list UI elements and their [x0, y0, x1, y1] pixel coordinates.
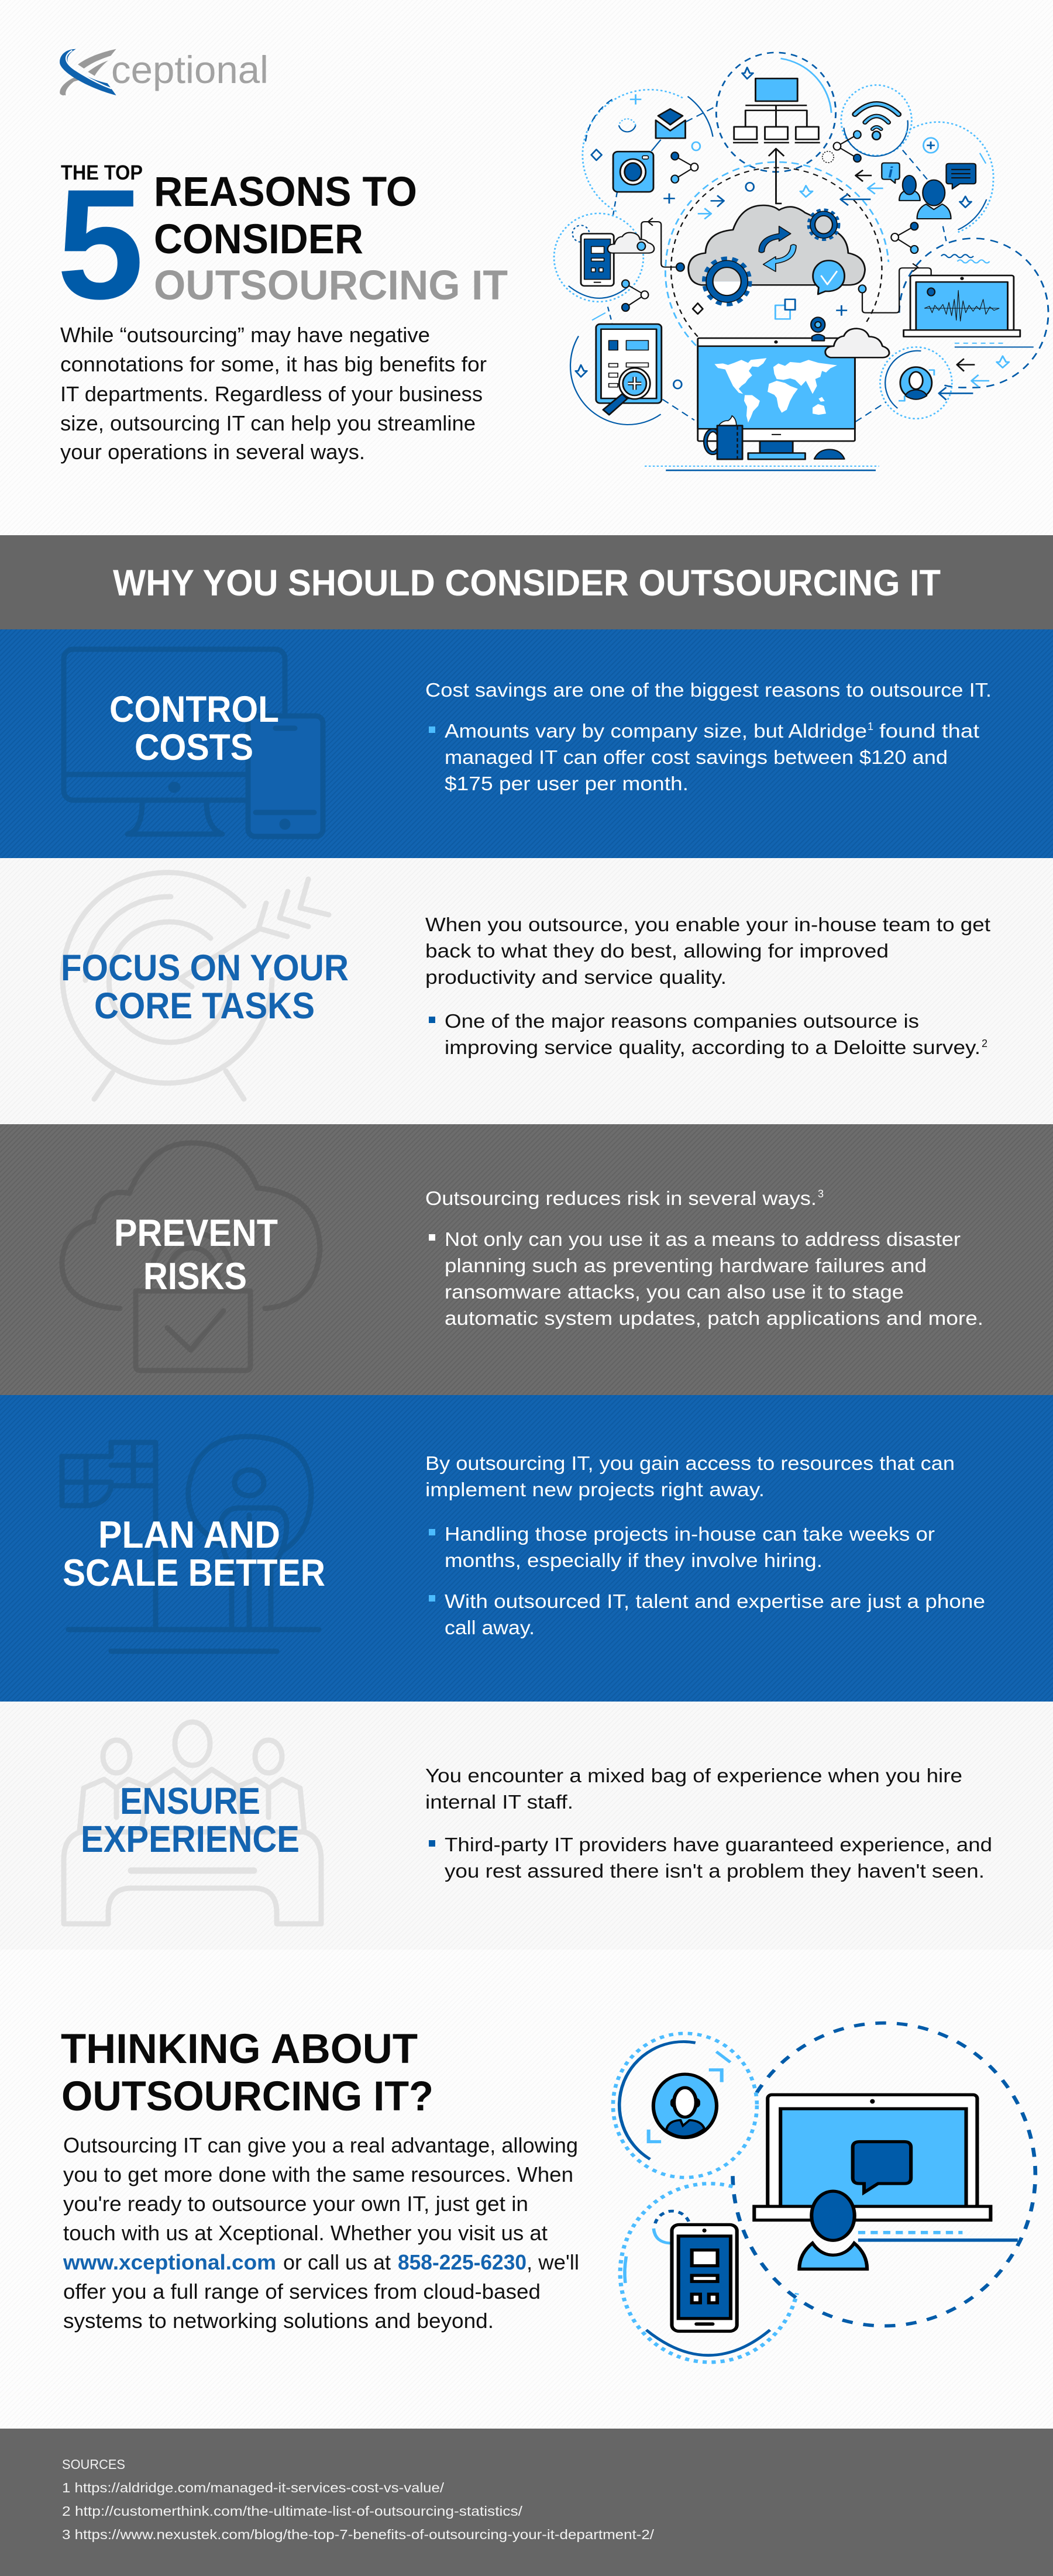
text: control costs: Cost savings are one of the biggest reasons to outsource IT.	[425, 679, 992, 701]
icon: info bubble: i	[888, 164, 893, 181]
panel: focus on core tasks	[0, 858, 1053, 1124]
title: REASONS TO	[154, 169, 417, 215]
icon: share nodes	[622, 130, 918, 311]
text: plan and scale better	[425, 1452, 985, 1638]
text: call to action paragraph: you're ready to outsource your own IT, just get in	[63, 2192, 528, 2216]
icon: info bubble	[882, 163, 900, 183]
heading: ensure experience: EXPERIENCE	[81, 1818, 300, 1860]
icon: sync arrows	[759, 226, 796, 271]
heading: focus on your core tasks	[61, 948, 349, 1027]
intro paragraph: your operations in several ways.	[60, 440, 365, 464]
text: ensure experience: you rest assured there isn't a problem they haven't seen.	[445, 1860, 985, 1882]
title	[57, 156, 508, 332]
text: prevent risks: automatic system updates, patch applications and more.	[445, 1307, 983, 1329]
text: focus on your core tasks	[425, 914, 990, 1058]
text: control costs: managed IT can offer cost savings between $120 and	[445, 746, 948, 768]
icon: headset avatar	[653, 2074, 717, 2138]
icon: team at table	[64, 1722, 321, 1924]
text: plan and scale better: months, especially if they involve hiring.	[445, 1549, 823, 1571]
footer: sources: SOURCES	[62, 2457, 125, 2472]
heading: prevent risks: RISKS	[143, 1255, 247, 1297]
heading: control costs	[109, 689, 279, 768]
heading: prevent risks	[114, 1211, 278, 1297]
panel: control costs	[0, 629, 1053, 858]
icon: coffee mug	[706, 416, 742, 459]
heading: prevent risks: PREVENT	[114, 1211, 278, 1254]
text: prevent risks: Outsourcing reduces risk in several ways.	[425, 1187, 817, 1209]
text: focus on your core tasks: improving service quality, according to a Deloitte survey.	[445, 1036, 980, 1058]
heading: plan and scale better	[63, 1513, 325, 1594]
gear: right	[809, 210, 838, 239]
title: 5	[57, 156, 144, 332]
icon: laptop with chat bubble	[754, 2095, 990, 2220]
heading: plan and scale better: SCALE BETTER	[63, 1551, 325, 1594]
footer: sources: 1 https://aldridge.com/managed-it-services-cost-vs-value/	[62, 2480, 445, 2495]
text: focus on your core tasks: productivity and service quality.	[425, 966, 727, 988]
heading: focus on your core tasks: FOCUS ON YOUR	[61, 948, 349, 989]
icon: monitor cloud	[825, 329, 889, 357]
icon: central cloud with gears	[689, 205, 865, 304]
text: prevent risks: 3	[818, 1188, 824, 1200]
text: plan and scale better: call away.	[445, 1617, 535, 1638]
icon: monitor and tablet	[64, 649, 323, 836]
text: prevent risks: Not only can you use it as a means to address disaster	[445, 1228, 961, 1250]
text: call to action paragraph: www.xceptional.com	[63, 2250, 276, 2274]
title: THE TOP	[61, 161, 143, 184]
icon: smartphone	[672, 2224, 737, 2331]
panel: prevent risks	[0, 1124, 1053, 1395]
illustration: support, laptop and phone	[613, 2023, 1035, 2362]
heading: control costs: COSTS	[135, 727, 253, 768]
hero: dashed orbit circles	[554, 53, 1048, 425]
heading: focus on your core tasks: CORE TASKS	[94, 986, 315, 1027]
text: control costs	[425, 679, 992, 794]
text: plan and scale better: implement new projects right away.	[425, 1479, 765, 1500]
text: plan and scale better: With outsourced IT, talent and expertise are just a phone	[445, 1590, 985, 1612]
title: CONSIDER	[154, 216, 363, 263]
icon: support people and chat	[899, 164, 976, 219]
intro paragraph: While “outsourcing” may have negative	[60, 323, 430, 347]
heading: plan and scale better: PLAN AND	[98, 1513, 280, 1556]
intro paragraph: connotations for some, it has big benefits for	[60, 352, 487, 376]
arrows pointing into hub	[698, 170, 989, 400]
text: call to action paragraph: systems to networking solutions and beyond.	[63, 2309, 494, 2333]
icon: camera	[613, 151, 653, 192]
hero illustration: IT network	[554, 53, 1048, 470]
icon: mouse	[814, 449, 845, 459]
icon: cloud with lock and check	[62, 1143, 320, 1370]
logo: Xceptional: ceptional	[111, 48, 269, 91]
title: OUTSOURCING IT	[154, 263, 508, 309]
text: focus on your core tasks: 2	[982, 1038, 987, 1049]
heading band: why you should consider: WHY YOU SHOULD CONSIDER OUTSOURCING IT	[113, 563, 941, 604]
accents: squares overlap	[775, 299, 795, 319]
accents: wave lines and dashes	[941, 254, 1034, 347]
text: call to action paragraph: 858-225-6230	[398, 2250, 526, 2274]
panel: call to action	[61, 2023, 1035, 2362]
text: focus on your core tasks: One of the major reasons companies outsource is	[445, 1010, 919, 1032]
icon: target with arrow	[63, 873, 329, 1099]
text: call to action paragraph: you to get more done with the same resources. When	[63, 2162, 573, 2186]
world map continents	[714, 358, 837, 422]
text: ensure experience: Third-party IT providers have guaranteed experience, and	[445, 1834, 992, 1855]
heading: ensure experience	[81, 1780, 300, 1860]
text: prevent risks	[425, 1187, 983, 1329]
text: prevent risks: ransomware attacks, you can also use it to stage	[445, 1281, 904, 1303]
text: ensure experience	[425, 1765, 992, 1882]
connector: cloud to phone	[641, 218, 680, 267]
text: call to action paragraph: offer you a full range of services from cloud-based	[63, 2279, 541, 2303]
text: control costs: 1	[868, 721, 873, 732]
panel: plan and scale better	[0, 1395, 1053, 1702]
heading band: why you should consider	[0, 535, 1053, 629]
icon: phone with cloud	[581, 233, 684, 286]
text: plan and scale better: Handling those projects in-house can take weeks or	[445, 1523, 935, 1545]
footer: sources: 2 http://customerthink.com/the-ultimate-list-of-outsourcing-statistics/	[62, 2503, 523, 2519]
text: prevent risks: planning such as preventing hardware failures and	[445, 1255, 927, 1276]
heading: control costs: CONTROL	[109, 689, 279, 730]
text: plan and scale better: By outsourcing IT, you gain access to resources that can	[425, 1452, 955, 1474]
text: control costs: found that	[879, 720, 979, 742]
header panel	[57, 48, 1048, 470]
text: control costs: Amounts vary by company size, but Aldridge	[445, 720, 867, 742]
heading: thinking about outsourcing: THINKING ABOUT	[61, 2026, 418, 2072]
text: call to action paragraph: touch with us at Xceptional. Whether you visit us at	[63, 2221, 548, 2245]
text: ensure experience: You encounter a mixed bag of experience when you hire	[425, 1765, 962, 1786]
text: focus on your core tasks: back to what they do best, allowing for improved	[425, 940, 889, 962]
illustration: orbit circles	[613, 2023, 1035, 2362]
text: focus on your core tasks: When you outsource, you enable your in-house team to get	[425, 914, 990, 935]
arrow: cloud to network	[769, 149, 784, 204]
connector: cloud to laptop	[859, 264, 931, 313]
icon: check bubble	[813, 260, 845, 294]
icon: headset avatar	[899, 367, 934, 401]
icon: wifi	[855, 104, 899, 140]
text: call to action paragraph: or call us at	[283, 2250, 391, 2274]
icon: webcam	[811, 317, 825, 341]
intro paragraph: IT departments. Regardless of your business	[60, 382, 483, 406]
base lines	[645, 466, 879, 470]
panel: ensure experience	[0, 1702, 1053, 1950]
heading: ensure experience: ENSURE	[120, 1780, 260, 1822]
text: call to action paragraph: Outsourcing IT can give you a real advantage, allowing	[63, 2133, 578, 2157]
logo: Xceptional	[60, 48, 269, 96]
icon: desktop monitor with world map	[698, 338, 855, 459]
text: ensure experience: internal IT staff.	[425, 1791, 573, 1813]
footer: sources	[0, 2429, 1053, 2576]
icon: envelope	[656, 109, 686, 138]
gear: left	[704, 259, 749, 304]
hero: small plus, ring and star accents	[576, 67, 1009, 388]
intro paragraph	[60, 323, 487, 464]
icon: flag and person	[62, 1437, 319, 1651]
icon: tablet with magnifier	[596, 324, 662, 415]
text: call to action paragraph: , we'll	[526, 2250, 579, 2274]
heading: thinking about outsourcing	[61, 2026, 433, 2120]
text: control costs: $175 per user per month.	[445, 773, 689, 794]
icon: laptop with waveform	[904, 275, 1020, 337]
intro paragraph: size, outsourcing IT can help you streamline	[60, 411, 476, 435]
heading: thinking about outsourcing: OUTSOURCING IT?	[61, 2074, 433, 2120]
icon: org chart network	[733, 78, 820, 143]
icon: person	[799, 2191, 867, 2269]
footer: sources: 3 https://www.nexustek.com/blog/the-top-7-benefits-of-outsourcing-your-it-department-2/	[62, 2527, 655, 2542]
text: call to action paragraph	[63, 2133, 579, 2333]
